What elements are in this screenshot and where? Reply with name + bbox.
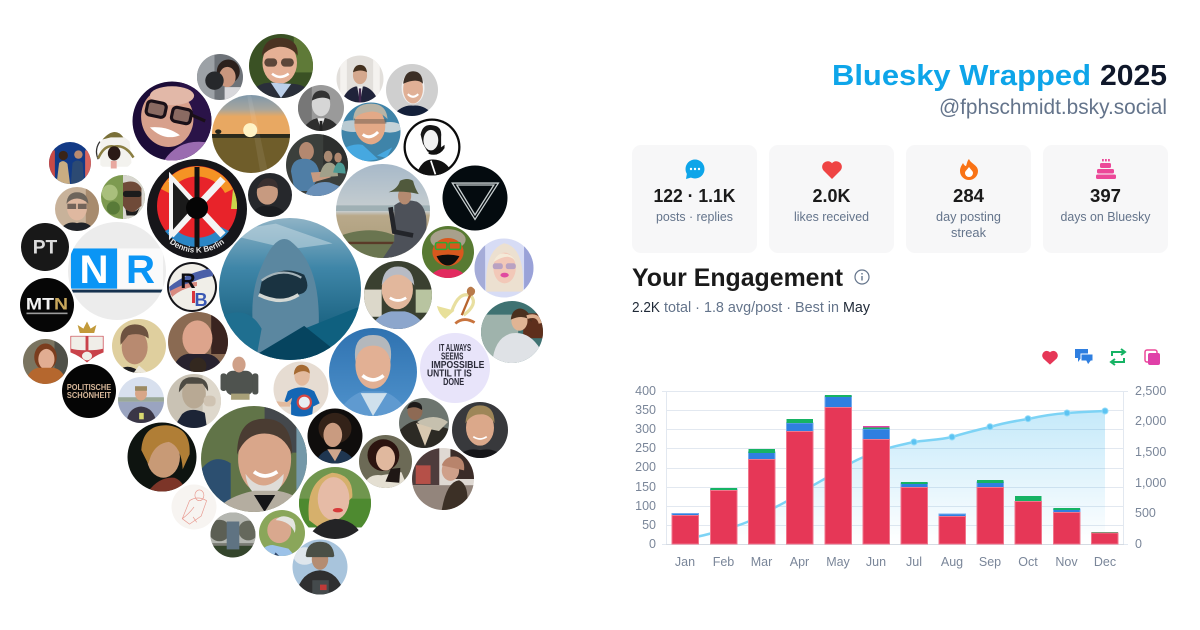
- month labels: Dec: [1094, 555, 1116, 569]
- month labels: Mar: [751, 555, 772, 569]
- cumulative points: [911, 408, 1108, 445]
- icon: quotes: [1145, 350, 1160, 365]
- avatar: portrait woman: [359, 435, 412, 488]
- avatar: RB logo: [167, 262, 217, 312]
- panel: days on Bluesky: 397: [1090, 186, 1121, 206]
- panel: day posting streak: day posting: [936, 210, 1001, 224]
- avatar: bald man on dark: [248, 173, 292, 217]
- avatar: soldier with helmet: [292, 540, 348, 594]
- avatar: old man sepia portrait: [167, 374, 221, 428]
- month labels: Nov: [1055, 555, 1078, 569]
- month labels: Feb: [713, 555, 734, 569]
- left axis labels: 250: [635, 441, 656, 455]
- chart: monthly engagement stacked bars with cumulative line: [635, 384, 1166, 569]
- title: 2025: [1100, 60, 1167, 92]
- title: Bluesky Wrapped: [832, 60, 1091, 92]
- cumulative area: [685, 411, 1105, 544]
- icon: heart: [822, 161, 842, 179]
- avatar: PT logo: PT: [33, 238, 58, 259]
- avatar: NR logo: [68, 222, 166, 320]
- panel: days on Bluesky: [1043, 145, 1168, 253]
- avatar: woman in beige hat: [412, 448, 474, 510]
- avatar: Politische Schoenheit logo: SCHÖNHEIT: [67, 391, 111, 400]
- avatar: older man smiling, checked shirt: [364, 261, 432, 329]
- avatar: quote text panel: SEEMS: [441, 352, 464, 363]
- grid lines: [662, 391, 1128, 544]
- right axis labels: 1,500: [1135, 445, 1166, 459]
- avatar: quote text panel: [420, 333, 490, 403]
- avatar: Politische Schoenheit logo: POLITISCHE: [67, 383, 112, 392]
- avatar: man with round glasses: [249, 34, 313, 98]
- avatar: man in cap by river: [118, 377, 164, 423]
- avatar: smiling man black glasses, purple tint: [132, 82, 212, 160]
- icon: replies: [1075, 349, 1093, 365]
- avatar: PT logo: [21, 223, 69, 271]
- left axis labels: 400: [635, 384, 656, 398]
- avatar cluster: [20, 34, 543, 594]
- left axis labels: 350: [635, 403, 656, 417]
- avatar: blonde woman in park: [299, 467, 371, 539]
- avatar: Bernie Sanders style portrait: [259, 510, 305, 556]
- avatar: red muppet: [422, 226, 474, 278]
- month labels: Jul: [906, 555, 922, 569]
- icon: flame: [960, 159, 978, 180]
- avatar: man group outdoors: [286, 134, 348, 196]
- avatar: blue t-shirt man: [274, 362, 328, 416]
- text: engagement summary: May: [843, 300, 871, 316]
- month labels: [675, 555, 1116, 569]
- chart legend icons: [1043, 349, 1160, 365]
- panel: day posting streak: 284: [953, 186, 984, 206]
- avatar: curly-haired woman: [308, 408, 362, 464]
- avatar: black and white suit man: [336, 56, 384, 102]
- handle: @fphschmidt.bsky.social: [939, 96, 1167, 119]
- avatar: man winking: [112, 319, 166, 373]
- panel: likes received: [769, 145, 894, 253]
- icon: birthday cake: [1096, 159, 1116, 179]
- month labels: Jan: [675, 555, 695, 569]
- avatar: Dennis K Berlin logo: Dennis K Berlin: [170, 238, 224, 253]
- avatar: inverted triangle logo: [442, 166, 508, 230]
- avatar: Tyrion portrait: [128, 422, 196, 492]
- left axis labels: 200: [635, 460, 656, 474]
- avatar: smiling man on grey: [386, 64, 438, 116]
- avatar: MTN logo: [20, 278, 74, 332]
- left axis labels: 50: [642, 518, 656, 532]
- avatar: blonde with sunglasses: [474, 238, 534, 298]
- avatar: quote text panel: DONE: [443, 377, 464, 388]
- avatar: quote text panel: UNTIL IT IS: [427, 368, 472, 379]
- right axis labels: 1,000: [1135, 476, 1166, 490]
- right axis labels: 0: [1135, 537, 1142, 551]
- avatar: podcaster with microphone: [197, 54, 243, 101]
- text: engagement summary: 2.2K: [632, 300, 660, 316]
- panel: day posting streak: streak: [951, 226, 987, 240]
- panel: posts and replies: [632, 145, 757, 253]
- right axis labels: 500: [1135, 506, 1156, 520]
- month labels: Apr: [790, 555, 809, 569]
- avatar: Politische Schoenheit logo: [62, 364, 116, 418]
- icon: reposts: [1111, 349, 1125, 365]
- month labels: May: [826, 555, 851, 569]
- avatar: Lincoln engraving: [404, 118, 460, 176]
- panel: posts and replies: posts · replies: [656, 210, 733, 224]
- avatar: bald man with microphone: [168, 312, 228, 374]
- avatar: monochrome portrait: [298, 85, 344, 131]
- month labels: Jun: [866, 555, 886, 569]
- left axis labels: 150: [635, 480, 656, 494]
- month labels: Aug: [941, 555, 963, 569]
- month labels: Sep: [979, 555, 1001, 569]
- panel: days on Bluesky: days on Bluesky: [1060, 210, 1151, 224]
- right axis labels: 2,500: [1135, 384, 1166, 398]
- icon: likes: [1043, 351, 1057, 364]
- avatar: quote text panel: IT ALWAYS: [439, 343, 471, 354]
- bars: red likes: [672, 408, 1118, 544]
- avatar: man in sunglasses and foliage: [101, 175, 145, 219]
- avatar: man in grey sweater: [221, 357, 258, 400]
- avatar: RB logo: B: [194, 290, 208, 310]
- avatar: blond man portrait: [452, 402, 508, 458]
- icon: speech bubble: [686, 160, 704, 179]
- right axis labels: 2,000: [1135, 414, 1166, 428]
- panel: likes received: likes received: [794, 210, 869, 224]
- avatar: crest with crown: [70, 321, 104, 362]
- avatar: man in dark jacket: [399, 398, 449, 448]
- avatar: RB logo: R: [180, 270, 196, 293]
- avatar: woman in white on sofa: [481, 301, 543, 363]
- avatar: great white shark: [219, 218, 361, 360]
- avatar: woman with red hair: [23, 339, 68, 384]
- heading: your engagement: Your Engagement: [632, 264, 844, 292]
- avatar: cartoon dog: [96, 132, 134, 168]
- avatar: handshake with flags: [49, 142, 91, 184]
- avatar: Dennis K Berlin logo: [147, 159, 247, 259]
- left axis labels: 0: [649, 537, 656, 551]
- bars: green reposts: [710, 395, 1118, 533]
- left axis labels: 100: [635, 499, 656, 513]
- avatar: MTN logo: MTN: [26, 295, 68, 313]
- avatar: NR logo: R: [126, 247, 155, 292]
- avatar: grey-haired man with glasses: [55, 187, 99, 231]
- month labels: Oct: [1018, 555, 1038, 569]
- avatar: man in blue shirt, sky: [339, 102, 402, 162]
- bars: blue replies: [672, 396, 1080, 518]
- icon: info: [855, 270, 869, 284]
- avatar: quote text panel: IMPOSSIBLE: [431, 360, 485, 371]
- text: engagement summary: total · 1.8 avg/post · Best in: [664, 300, 839, 316]
- avatar: sunset over field: [212, 95, 290, 173]
- avatar: Berlin Wall segment: [209, 512, 258, 558]
- avatar: NR logo: N: [79, 247, 108, 292]
- panel: day posting streak: [906, 145, 1031, 253]
- avatar: hunting horn illustration: [437, 286, 476, 324]
- left axis labels: [635, 384, 656, 551]
- avatar: grey-haired man on blue: [329, 328, 417, 416]
- avatar: large smiling man: [201, 406, 307, 512]
- avatar: man in hat overlooking plains: [336, 164, 430, 258]
- left axis labels: 300: [635, 422, 656, 436]
- cumulative line: [685, 411, 1105, 539]
- panel: likes received: 2.0K: [812, 186, 850, 206]
- right axis labels: [1135, 384, 1166, 551]
- avatar: red line sketch: [172, 484, 216, 530]
- bar: quotes: [863, 426, 890, 428]
- panel: posts and replies: 122 · 1.1K: [654, 186, 736, 206]
